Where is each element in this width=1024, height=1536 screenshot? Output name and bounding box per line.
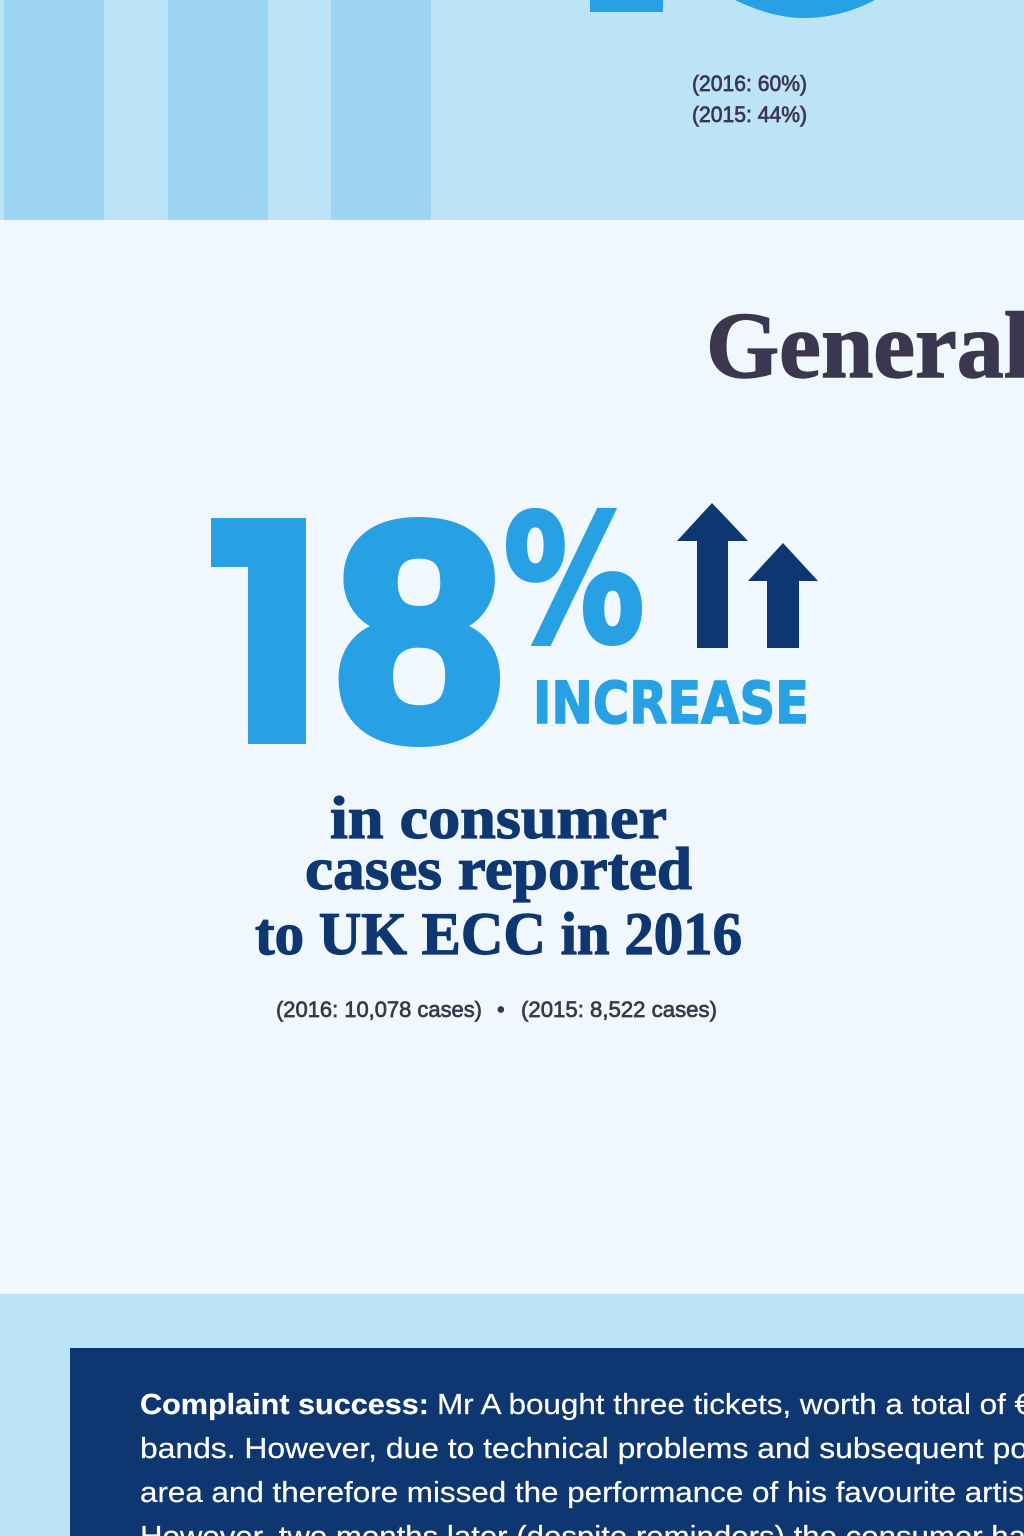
case counts — [276, 997, 717, 1022]
big number 18: 1 — [174, 456, 350, 820]
callout text: bands. However, due to technical problems and subsequent po — [140, 1433, 1024, 1465]
icon: two up arrows — [677, 503, 818, 648]
big number 18: 8 — [335, 459, 504, 803]
case counts: • — [497, 997, 505, 1022]
callout text: Mr A bought three tickets, worth a total of € — [437, 1389, 1024, 1421]
previous year figures: (2016: 60%) — [692, 71, 807, 96]
previous year figures — [692, 71, 807, 127]
statistic description: to UK ECC in 2016 — [255, 901, 742, 967]
case counts: (2016: 10,078 cases) — [276, 997, 482, 1022]
statistic description — [255, 785, 742, 967]
percent sign: % — [503, 478, 644, 683]
label: increase: INCREASE — [533, 669, 809, 737]
panel: top statistic band — [0, 0, 1024, 220]
case counts: (2015: 8,522 cases) — [521, 997, 717, 1022]
bar chart: cropped columns — [4, 0, 431, 220]
panel: lower band — [0, 1294, 1024, 1536]
big number 18 — [211, 517, 500, 747]
statistic description: in consumer — [330, 785, 667, 851]
cropped large figure from the section above — [590, 0, 875, 18]
callout text — [140, 1389, 1024, 1536]
panel: complaint success callout — [70, 1348, 1024, 1536]
statistic description: cases reported — [305, 836, 692, 902]
callout text: Complaint success: — [140, 1389, 429, 1421]
heading: General: General — [706, 294, 1024, 398]
previous year figures: (2015: 44%) — [692, 102, 807, 127]
statistic: 18% increase — [211, 503, 818, 747]
callout text: area and therefore missed the performance of his favourite artis — [140, 1477, 1024, 1509]
